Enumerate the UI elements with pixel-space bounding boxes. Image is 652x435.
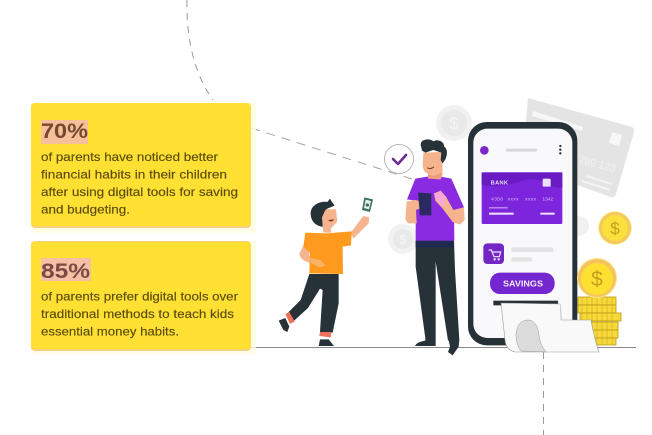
icon: gold dollar coin upper (598, 211, 632, 245)
icon: grey credit card (522, 98, 634, 197)
icon: gold dollar coin lower (577, 258, 617, 298)
bank card: 1342 (542, 197, 553, 203)
illustration: paper receipt (501, 303, 599, 352)
bank card (482, 172, 562, 224)
icon: gold dollar coin upper: $ (610, 219, 620, 238)
illustration: boy holding banknote (279, 197, 373, 346)
text block: 70% description: after using digital tools for saving (41, 185, 238, 199)
text block: 70% description: of parents have noticed better (41, 150, 218, 164)
text block: 85% description: traditional methods to teach kids (41, 307, 234, 321)
text block: 85% description: essential money habits. (41, 324, 179, 338)
father phone (418, 193, 431, 215)
icon: check mark badge (384, 144, 414, 174)
heading: 70%: 70% (41, 120, 88, 143)
text block: 70% description (41, 150, 238, 216)
father trousers (416, 241, 459, 341)
icon: grey dollar coin middle (388, 224, 418, 254)
boy banknote (362, 197, 373, 212)
boy arms (351, 216, 369, 239)
text block: 85% description: of parents prefer digital tools over (41, 290, 238, 304)
panel: 70% statistic (31, 103, 256, 233)
illustration: father holding phone (405, 139, 465, 355)
icon: grey dollar coin top (436, 105, 472, 141)
icon: gold coin stack (578, 297, 621, 345)
text block: 70% description: financial habits in their children (41, 168, 227, 182)
text block: 70% description: and budgeting. (41, 202, 130, 216)
icon: gold dollar coin lower: $ (591, 268, 603, 291)
icon: grey credit card: 789 123 (577, 154, 617, 175)
father t-shirt (407, 177, 464, 241)
icon: grey dollar coin top: $ (449, 114, 459, 133)
boy t-shirt (303, 231, 352, 274)
statistic highlight: 85% (41, 258, 91, 281)
cart icon tile (483, 243, 504, 264)
bank card: xxxx (508, 197, 519, 203)
savings button: SAVINGS (503, 279, 543, 289)
text block: 85% description (41, 290, 238, 338)
receipt slot (493, 301, 558, 305)
bank card: xxxx (525, 197, 536, 203)
father arms (405, 200, 423, 223)
app top bar (480, 146, 489, 155)
father head (423, 152, 443, 179)
heading: 85%: 85% (41, 260, 90, 283)
icon: grey dollar coin middle: $ (399, 232, 407, 247)
panel: 85% statistic (31, 241, 256, 354)
illustration: smartphone with banking app (468, 122, 577, 345)
icon: grey coin behind phone (569, 216, 589, 236)
bank card: BANK (491, 181, 509, 187)
father shoes (415, 338, 436, 346)
savings button (490, 273, 555, 294)
bank card: 4356 (491, 197, 503, 203)
boy trousers (288, 274, 339, 333)
statistic highlight: 70% (41, 120, 88, 144)
boy head (318, 209, 337, 233)
